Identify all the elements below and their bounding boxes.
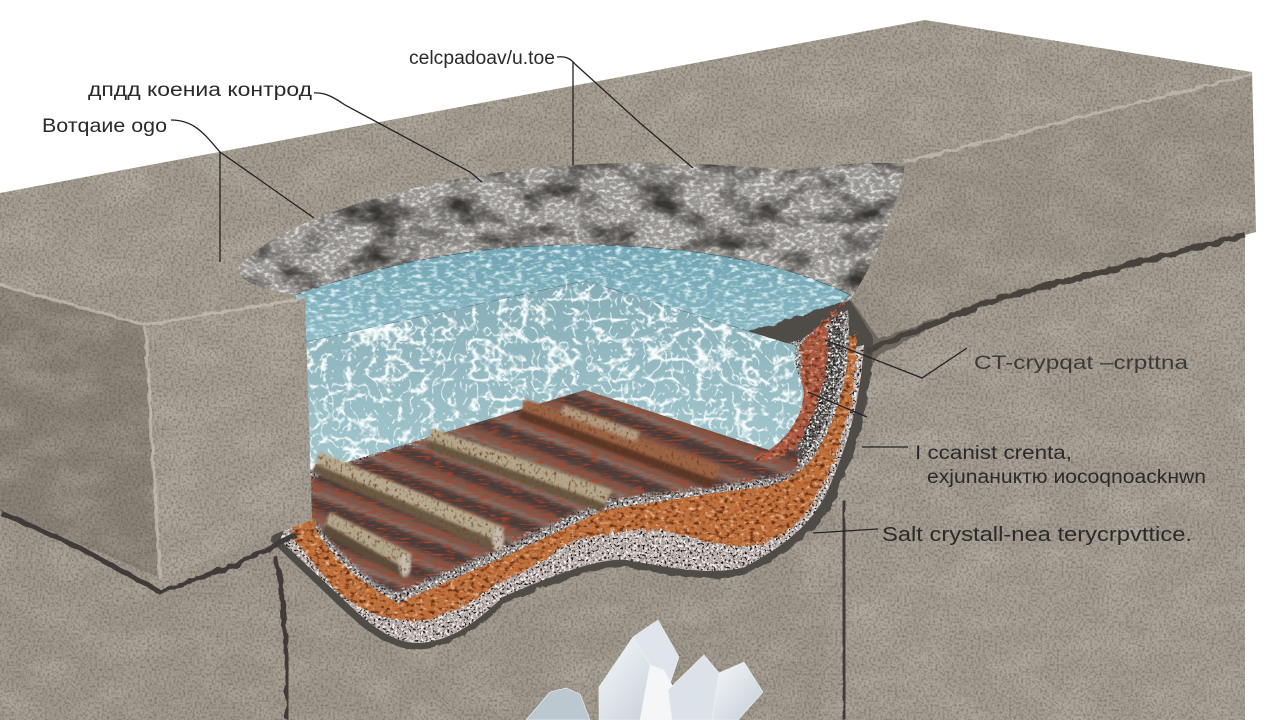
panel: corroded rust floor	[310, 385, 800, 593]
panel: water block left face	[306, 281, 585, 465]
label: right upper: CT-crypqat –crpttna	[974, 353, 1189, 374]
label: top left upper: дпдд коениа контрод	[88, 80, 312, 101]
label: right middle: exjunaнuктю иocoqnoackнwn	[927, 467, 1206, 488]
rebar 2	[425, 428, 612, 512]
panel: concrete slab top surface	[0, 20, 1252, 325]
label: right lower: Salt crystall-nea terycrpvttice.	[882, 524, 1192, 546]
crack: left vertical	[274, 556, 288, 720]
panel: grey granular inner layer	[310, 310, 849, 603]
panel: front left block front face	[0, 285, 160, 578]
label: top centre: celcpadoav/u.toe	[409, 48, 555, 69]
panel: water block right face	[585, 281, 804, 450]
label: right middle: I ccanist crenta,	[915, 443, 1072, 464]
rebar 3	[518, 399, 720, 488]
panel: front left block side face	[145, 298, 312, 578]
rebar 4	[322, 512, 412, 577]
rebar 1	[312, 452, 505, 552]
icon: salt crystals	[526, 620, 763, 720]
crack: left horizontal joint	[0, 512, 296, 592]
crack: right vertical	[843, 500, 845, 720]
panel: gravel aggregate layer	[280, 345, 864, 643]
panel: orange rust band	[290, 330, 856, 620]
icon: rusty rebars	[312, 399, 720, 577]
panel: lower left concrete face	[0, 330, 880, 720]
crack: right horizontal joint	[866, 235, 1245, 350]
panel: dark grey wall layer	[772, 310, 844, 472]
panel: outer dark cavity edge	[270, 300, 872, 649]
highlight: chipped block edges	[0, 74, 1252, 578]
panel: broken wedge under upper block	[835, 292, 966, 372]
label: right middle	[915, 443, 1206, 488]
panel: upper right concrete face	[850, 72, 1256, 338]
callout leaders	[171, 57, 967, 533]
panel: red rust right wall overlay	[752, 295, 850, 460]
panel: water surface	[295, 245, 850, 346]
panel: crumbled cavity back wall	[238, 163, 905, 345]
panel: lower right concrete face	[820, 225, 1245, 720]
label: top left lower: Вотqаие оgо	[42, 116, 167, 137]
